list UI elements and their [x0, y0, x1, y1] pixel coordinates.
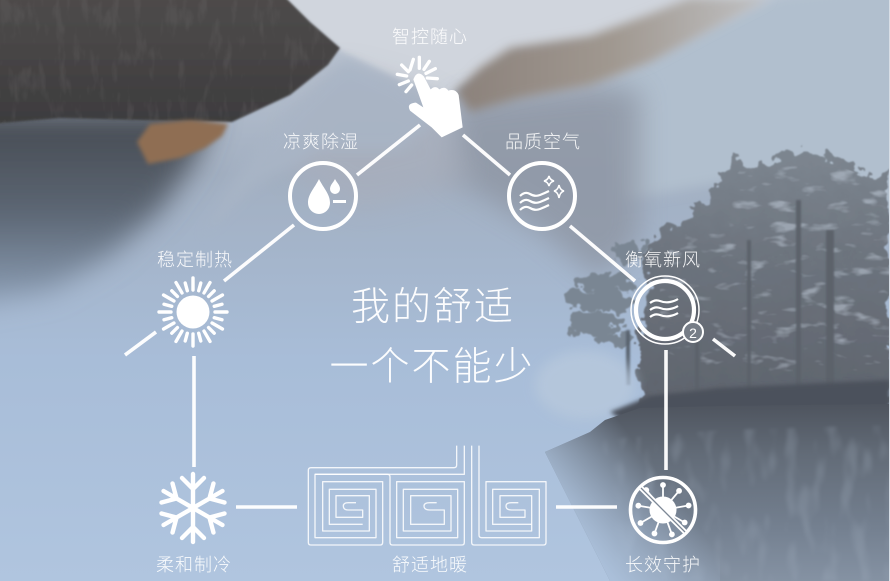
gray slope below brown hill — [440, 85, 640, 280]
title: 我的舒适 — [351, 286, 515, 329]
feature: long lasting protection: 长效守护 — [625, 555, 701, 575]
feature: smart control: 智控随心 — [392, 27, 468, 47]
icon: snowflake — [158, 474, 228, 542]
dark mountain — [0, 0, 340, 124]
right blue ridge — [600, 0, 890, 220]
feature: gentle cooling — [156, 474, 232, 575]
feature: stable heating: 稳定制热 — [157, 250, 233, 270]
title — [329, 286, 535, 389]
shoreline — [610, 380, 890, 425]
gaps of pale sky between pines — [660, 160, 890, 372]
title: 一个不能少 — [329, 346, 535, 389]
icon: sun — [159, 278, 227, 346]
feature: balanced oxygen fresh air — [625, 250, 703, 344]
icon: crossed out virus — [630, 478, 696, 542]
feature: quality air: 品质空气 — [505, 132, 581, 152]
feature: cool dehumidify: 凉爽除湿 — [283, 132, 359, 152]
feature: smart control — [392, 27, 468, 137]
feature: comfort floor heating — [308, 446, 546, 575]
mountain texture — [0, 0, 340, 124]
forest mass — [640, 150, 890, 408]
house outline connector lines — [125, 125, 735, 507]
icon: waves and sparkles in circle — [509, 163, 575, 229]
feature: cool dehumidify — [283, 132, 359, 229]
left pine — [564, 242, 648, 346]
feature: quality air — [505, 132, 581, 229]
fog over lake left side — [545, 406, 720, 581]
feature: balanced oxygen fresh air: 衡氧新风 — [625, 250, 701, 270]
feature: long lasting protection — [625, 478, 701, 575]
icon: water drops in circle — [290, 163, 356, 229]
lake surface reflections — [600, 425, 890, 581]
lake water — [545, 404, 890, 581]
icon: Q ring with waves and subscript 2: 2 — [689, 325, 697, 341]
rust coloured rock — [137, 120, 228, 164]
icon: underfloor heating pipes — [308, 446, 546, 545]
mist band along mountain foot — [200, 60, 440, 240]
icon: tapping hand — [397, 57, 463, 137]
low fog at tree foot — [535, 351, 635, 419]
left pine trunks — [626, 330, 687, 385]
brown hill — [455, 0, 770, 112]
dark fog-covered lower slope — [0, 110, 215, 310]
pine trunks — [695, 200, 834, 400]
sky — [260, 0, 800, 95]
feature: stable heating — [157, 250, 233, 346]
feature: gentle cooling: 柔和制冷 — [156, 555, 232, 575]
pine forest — [564, 150, 890, 408]
feature: comfort floor heating: 舒适地暖 — [392, 555, 468, 575]
gray mist in the centre valley — [290, 70, 470, 210]
